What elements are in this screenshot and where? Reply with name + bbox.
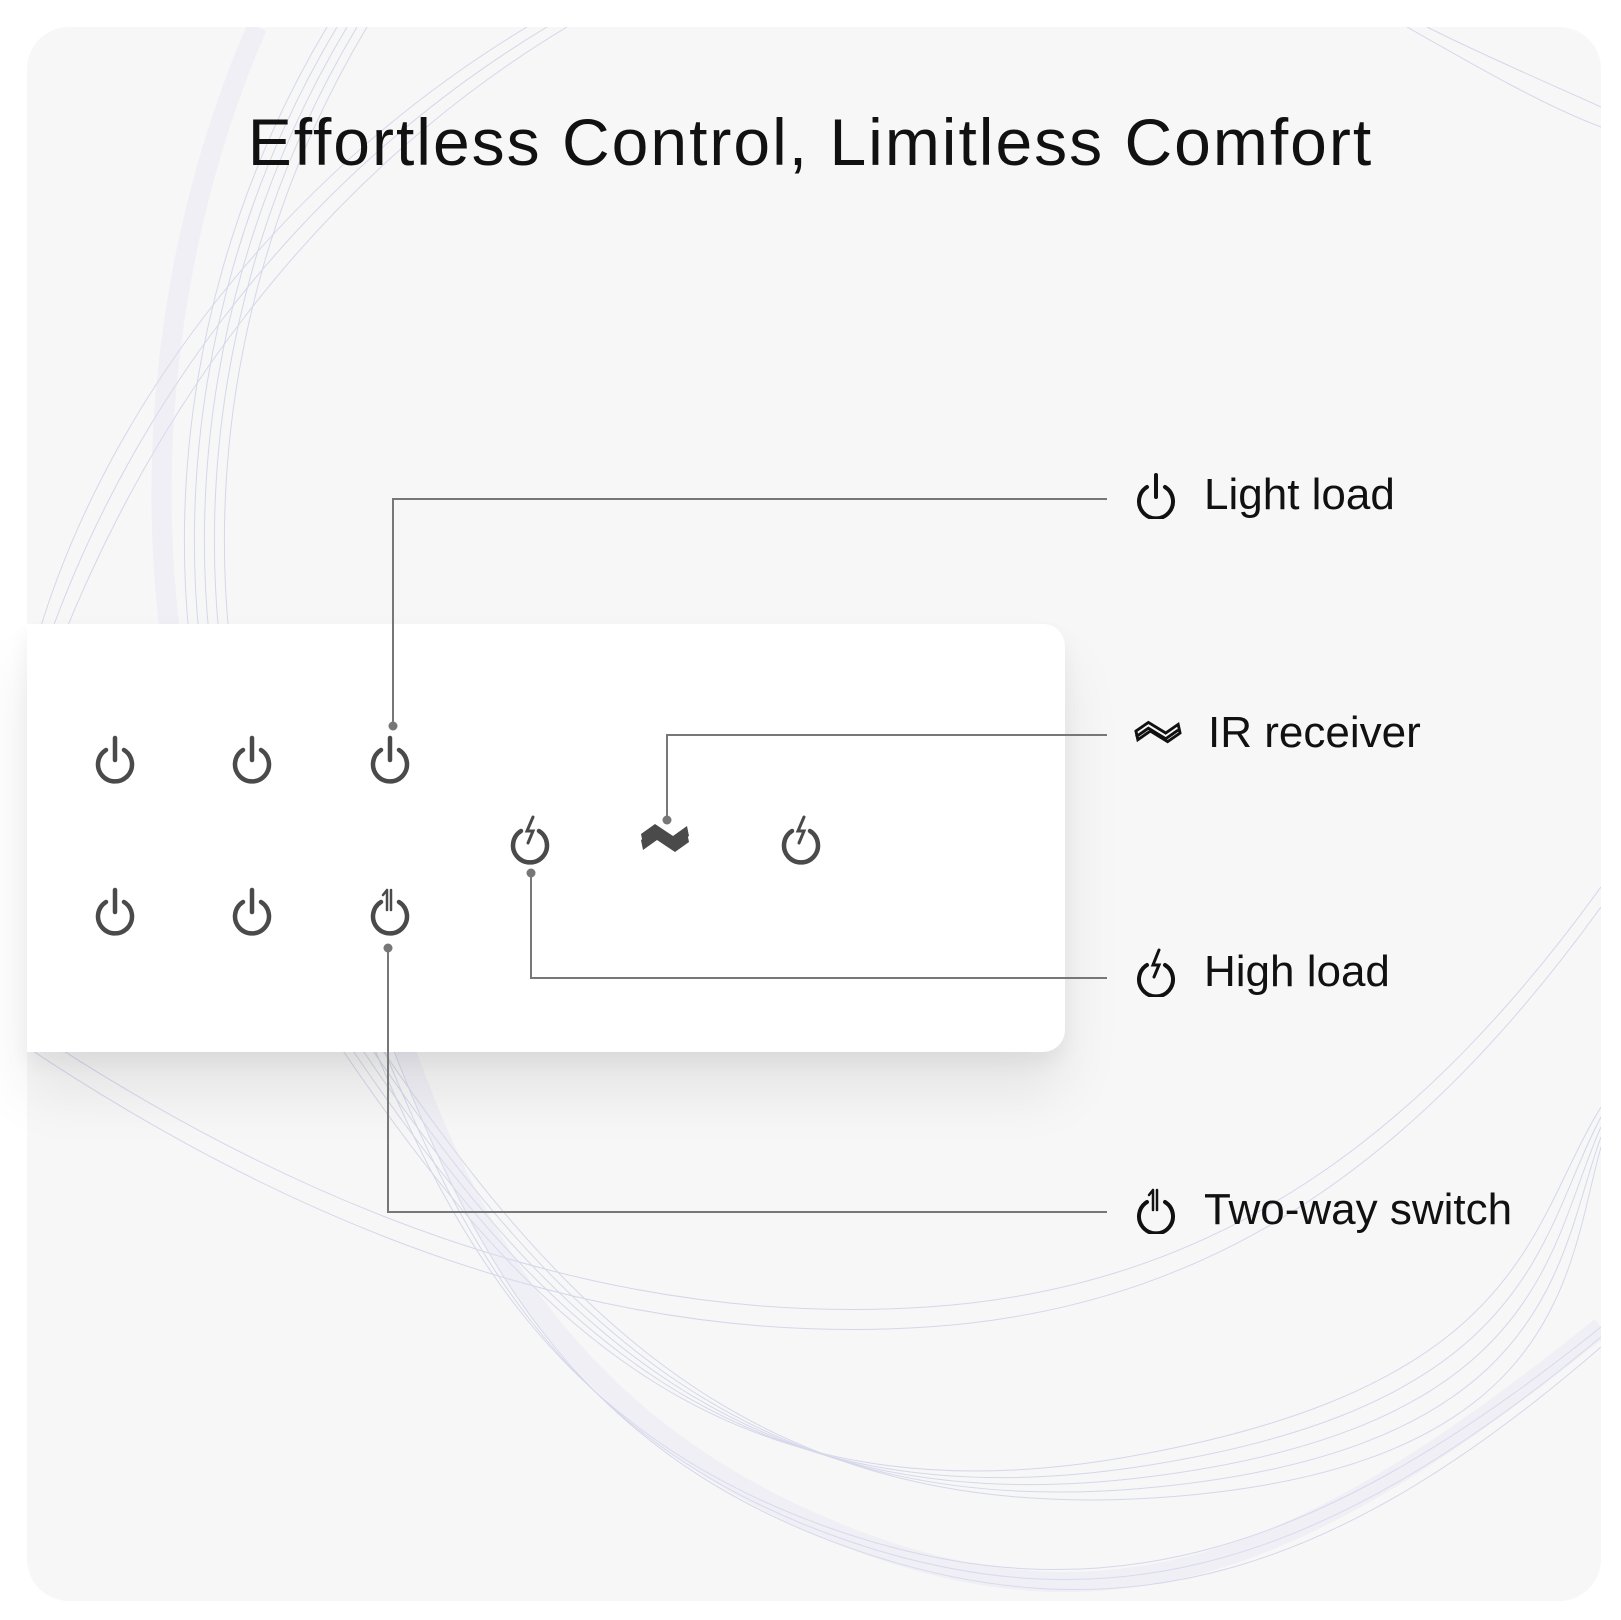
label: IR receiver: IR receiver [1208,708,1421,757]
label: two-way switch: Two-way switch [1204,1185,1512,1234]
label: high load: High load [1204,947,1390,996]
title: Effortless Control, Limitless Comfort [248,105,1373,179]
panel: switch [27,624,1065,1052]
label: light load: Light load [1204,470,1395,519]
